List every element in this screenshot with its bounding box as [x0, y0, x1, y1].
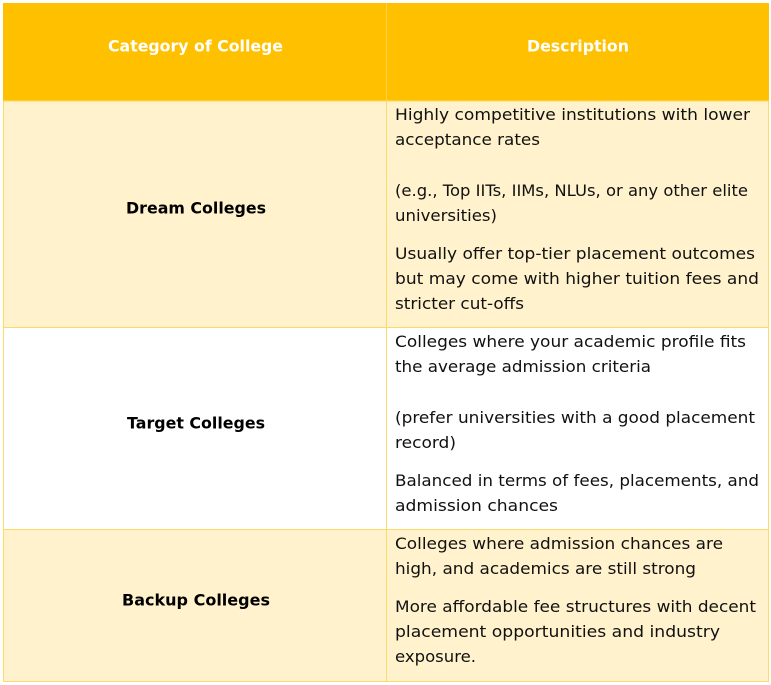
- description: dream colleges: (e.g., Top IITs, IIMs, NLUs, or any other elite: [395, 181, 748, 200]
- description: target colleges: (prefer universities with a good placement: [395, 408, 755, 427]
- description: target colleges: [395, 332, 759, 515]
- description: target colleges: admission chances: [395, 496, 558, 515]
- description: target colleges: the average admission criteria: [395, 357, 651, 376]
- row: target colleges: [4, 328, 768, 530]
- description: dream colleges: but may come with higher tuition fees and: [395, 269, 759, 288]
- description: backup colleges: More affordable fee structures with decent: [395, 597, 756, 616]
- description: target colleges: Colleges where your academic profile fits: [395, 332, 746, 351]
- description: backup colleges: high, and academics are still strong: [395, 559, 696, 578]
- description: backup colleges: Colleges where admission chances are: [395, 534, 723, 553]
- description: backup colleges: placement opportunities and industry: [395, 622, 720, 641]
- description: target colleges: record): [395, 433, 456, 452]
- header: category of college: Category of College: [108, 36, 283, 56]
- description: dream colleges: acceptance rates: [395, 130, 540, 149]
- label: backup colleges: Backup Colleges: [122, 590, 270, 610]
- description: dream colleges: [395, 105, 759, 313]
- description: backup colleges: [395, 534, 756, 666]
- header row: [3, 3, 769, 101]
- label: dream colleges: Dream Colleges: [126, 198, 266, 218]
- header: description: Description: [527, 36, 629, 56]
- description: dream colleges: Highly competitive institutions with lower: [395, 105, 750, 124]
- description: dream colleges: universities): [395, 206, 497, 225]
- description: dream colleges: Usually offer top-tier placement outcomes: [395, 244, 755, 263]
- description: dream colleges: stricter cut-offs: [395, 294, 524, 313]
- description: backup colleges: exposure.: [395, 647, 476, 666]
- label: target colleges: Target Colleges: [127, 414, 265, 432]
- description: target colleges: Balanced in terms of fees, placements, and: [395, 471, 759, 490]
- row: backup colleges: [4, 530, 768, 682]
- row: dream colleges: [4, 101, 768, 328]
